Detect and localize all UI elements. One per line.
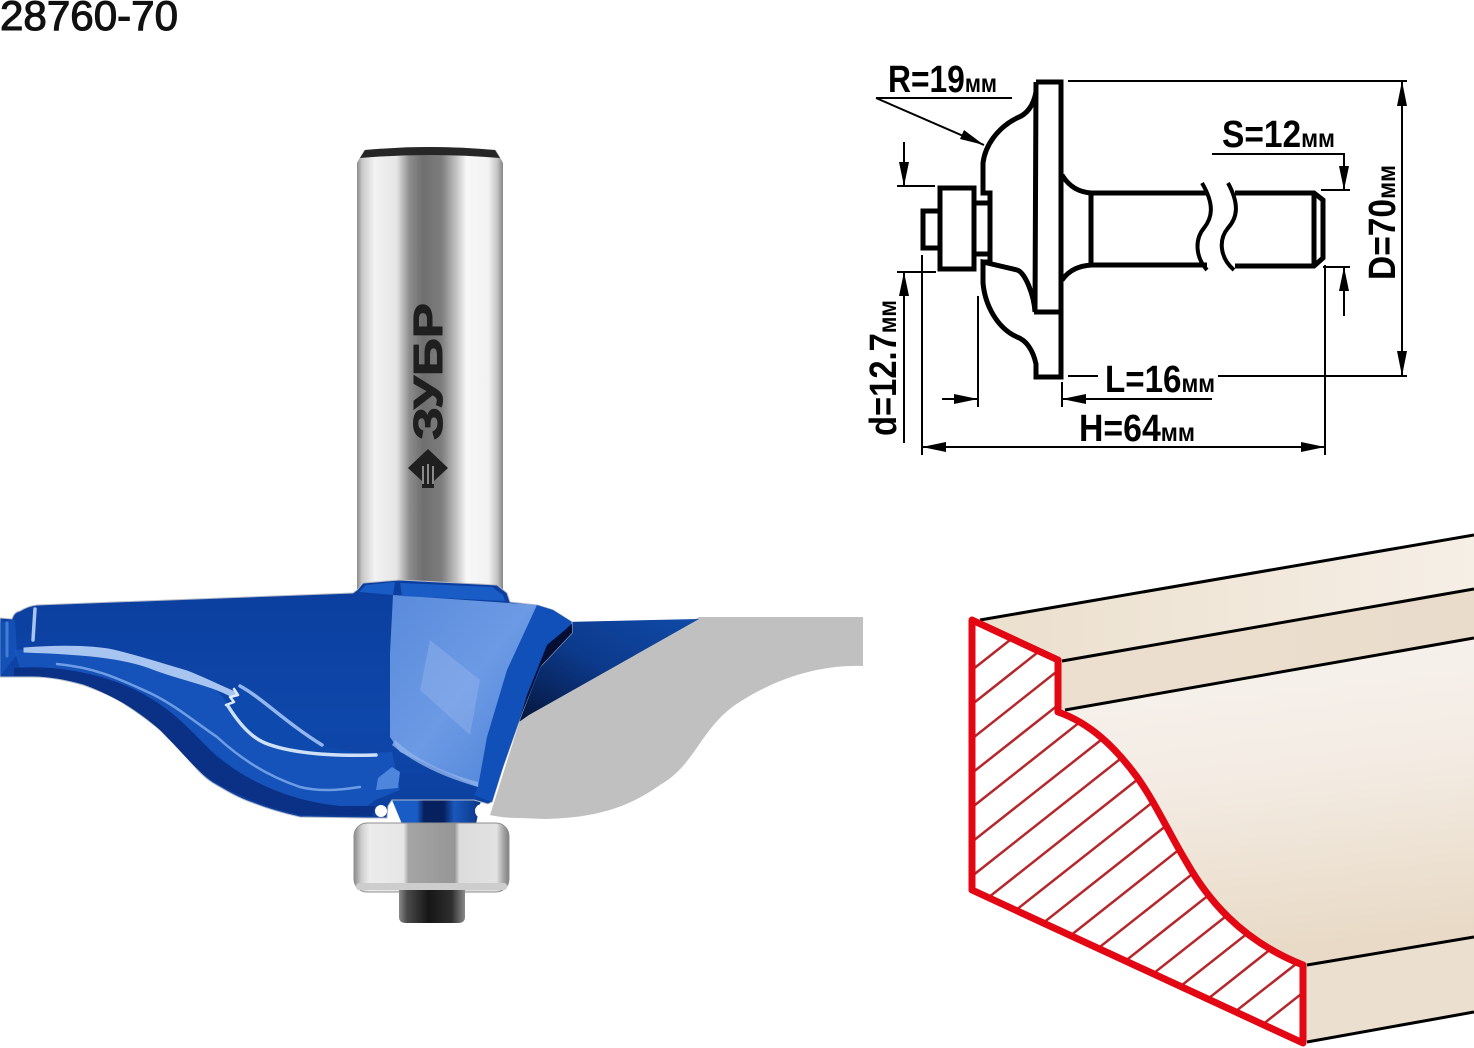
middle strip	[1060, 589, 1474, 711]
bolt	[399, 890, 465, 923]
flange	[983, 82, 1061, 377]
blue cutter body	[0, 580, 572, 818]
collar	[975, 203, 989, 254]
dark lower rim	[14, 667, 375, 816]
dark side of cutter	[519, 619, 699, 722]
facet streaks	[392, 640, 480, 787]
main curved face	[1060, 638, 1474, 965]
label: D: D=70мм	[1362, 165, 1404, 280]
light facet	[390, 595, 537, 787]
collar highlights	[359, 582, 505, 601]
lens shape	[227, 688, 376, 756]
lighter band under gloss	[14, 647, 400, 812]
label: L: L=16мм	[1105, 359, 1215, 401]
hatched profile	[972, 620, 1303, 1043]
label: S: S=12мм	[1222, 114, 1335, 156]
pilot bearing	[940, 188, 974, 269]
notches	[375, 804, 489, 818]
logo diamond	[408, 449, 448, 488]
dimension lines	[876, 81, 1407, 455]
gray cut profile	[490, 617, 863, 819]
dark crease	[519, 624, 572, 722]
bit outline	[923, 82, 1323, 377]
hatch lines	[976, 640, 1300, 1022]
shank right	[1235, 193, 1323, 266]
shank left	[1062, 175, 1207, 280]
moulding section illustration	[972, 535, 1474, 1043]
upper gloss streak	[24, 646, 240, 698]
red profile outline	[972, 620, 1303, 1043]
top strip	[976, 535, 1474, 661]
label: d: d=12.7мм	[863, 300, 905, 436]
shank	[357, 147, 503, 590]
shank end cap	[360, 147, 500, 158]
edge lines	[980, 535, 1474, 1042]
label: R: R=19мм	[888, 59, 997, 101]
bearing	[354, 823, 509, 892]
bright strip facet	[474, 605, 572, 802]
label: H: H=64мм	[1079, 408, 1195, 450]
brand logo on shank	[405, 303, 451, 488]
pilot screw	[923, 211, 938, 248]
bottom strip	[1303, 937, 1474, 1043]
corner facet patch	[376, 767, 400, 790]
gloss highlights	[7, 609, 376, 790]
bright left rim	[0, 620, 17, 676]
arrowheads	[899, 81, 1407, 452]
lens edges	[226, 689, 238, 705]
logo wordmark: ЗУБР	[405, 303, 451, 440]
break lines	[1198, 183, 1236, 270]
technical drawing	[863, 59, 1407, 455]
upper cutter profile	[983, 92, 1036, 262]
bearing neck	[392, 800, 481, 824]
photo: router bit	[0, 147, 863, 923]
